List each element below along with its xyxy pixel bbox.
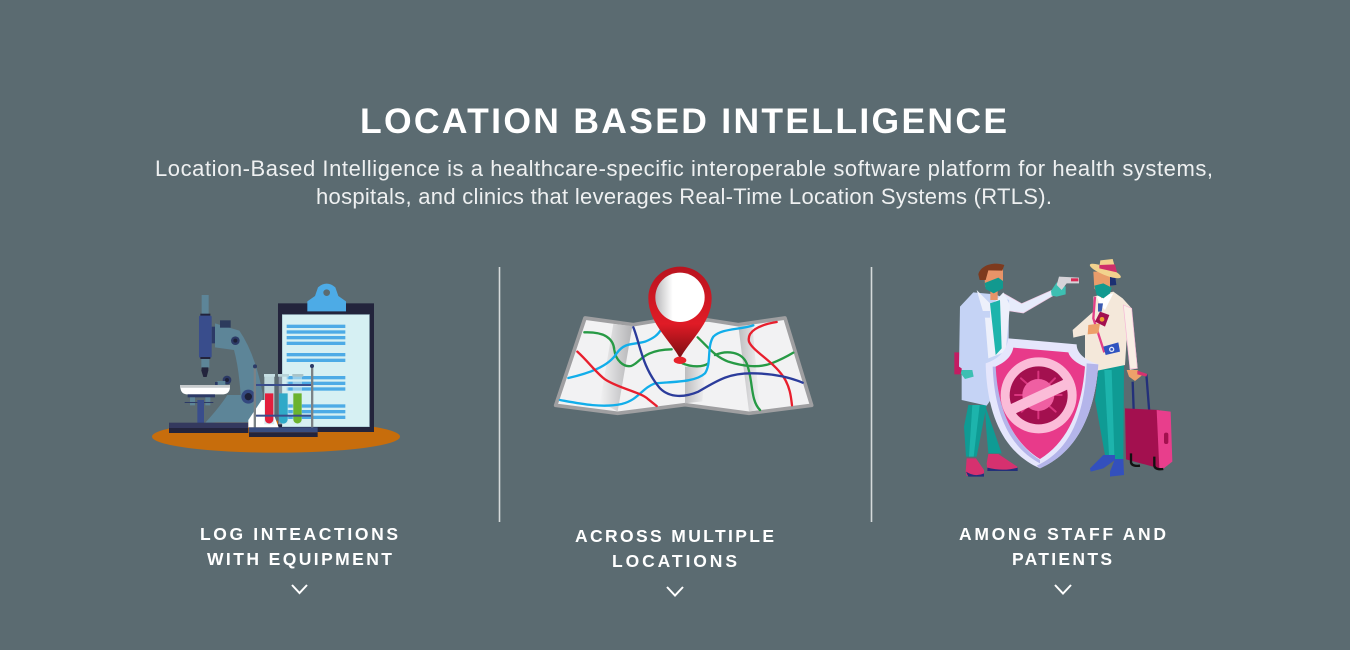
test tubes and rack <box>249 364 318 437</box>
column dividers <box>500 267 872 522</box>
caption: locations <box>575 526 774 571</box>
icon: laboratory microscope, clipboard and test tubes <box>152 284 400 453</box>
caption: staff and patients: PATIENTS <box>1012 549 1112 569</box>
caption: locations: ACROSS MULTIPLE <box>575 526 774 546</box>
intro paragraph: Location-Based Intelligence is a healthcare-specific interoperable software platform for health systems, <box>155 156 1213 181</box>
microscope <box>169 295 263 433</box>
chevron: equipment <box>292 585 307 593</box>
caption: equipment: LOG INTEACTIONS <box>200 524 398 544</box>
location pin <box>648 267 712 364</box>
intro paragraph <box>155 156 1213 209</box>
intro paragraph: hospitals, and clinics that leverages Real-Time Location Systems (RTLS). <box>316 184 1052 209</box>
doctor <box>954 264 1079 477</box>
caption: staff and patients: AMONG STAFF AND <box>959 524 1166 544</box>
icon: doctor and traveller with virus shield <box>954 259 1172 477</box>
caption: locations: LOCATIONS <box>612 551 737 571</box>
icon: folded map with location pin <box>556 267 812 413</box>
flask <box>248 400 279 427</box>
virus shield <box>986 338 1098 468</box>
chevron: staff and patients <box>1055 585 1071 594</box>
caption: staff and patients <box>959 524 1166 569</box>
suitcase <box>1125 371 1172 470</box>
caption: equipment <box>200 524 398 569</box>
clipboard <box>278 284 374 432</box>
caption: equipment: WITH EQUIPMENT <box>207 549 392 569</box>
title: LOCATION BASED INTELLIGENCE <box>360 101 1007 141</box>
traveller <box>1073 259 1142 477</box>
chevron: locations <box>667 587 683 596</box>
